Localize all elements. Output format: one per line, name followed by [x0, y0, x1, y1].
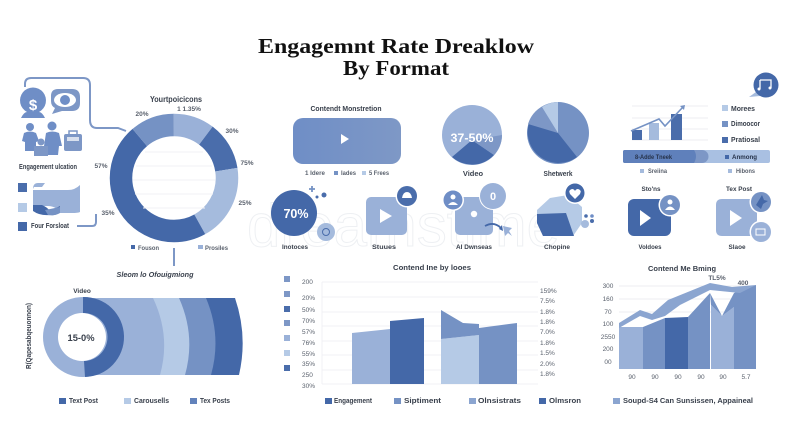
right axis	[540, 288, 557, 378]
donut labels: 30%	[225, 128, 239, 135]
left axis: 70%	[302, 318, 315, 325]
title	[258, 34, 535, 80]
curved bands	[83, 298, 243, 375]
tile: stories	[366, 184, 418, 251]
tile: text post: Tex Post	[726, 186, 753, 193]
tile: ai dwnseas: AI Dwnseas	[456, 244, 492, 251]
pie: video: 37-50%	[450, 131, 494, 145]
callouts: TL5%	[708, 275, 726, 282]
donut	[43, 297, 124, 377]
tile: videos: Voldoes	[638, 244, 662, 251]
progress band	[623, 150, 770, 163]
left squares	[284, 276, 290, 371]
left axis: 55%	[302, 351, 315, 358]
left axis: 35%	[302, 361, 315, 368]
connector	[77, 214, 96, 226]
right axis: 7.0%	[540, 329, 555, 336]
y axis: 160	[603, 296, 614, 303]
band legend: Sreiina	[648, 168, 667, 175]
donut labels: Yourtpoicicons	[150, 95, 202, 104]
y axis: 300	[603, 283, 614, 290]
tile legend: Iades	[341, 170, 356, 177]
tile: videos	[628, 186, 682, 251]
donut labels: 57%	[94, 163, 108, 170]
grid	[322, 282, 538, 384]
trend arrow	[631, 105, 685, 131]
icon: family	[22, 122, 62, 156]
y axis	[601, 283, 616, 366]
title: By Format	[343, 56, 449, 80]
tile: stories: Stuues	[372, 244, 396, 251]
y axis: 2550	[601, 334, 616, 341]
pie: video	[442, 105, 502, 178]
band legend: Hibons	[736, 168, 755, 175]
tile legend	[305, 170, 389, 177]
bottom legend: Soupd-S4 Can Sunsissen, Appaineal	[623, 398, 753, 405]
donut inner guide lines	[133, 152, 215, 208]
legend	[722, 105, 760, 144]
bottom legend: Olnsistrats	[478, 398, 521, 405]
icon: dollar coin	[20, 87, 46, 118]
bars	[632, 114, 682, 140]
tile: videos: Sto'ns	[642, 186, 661, 193]
tile: chopping	[537, 182, 594, 251]
tile: ai dwnseas	[442, 182, 512, 251]
panel: stepped area chart	[601, 264, 756, 381]
band legend	[59, 398, 230, 405]
tile: ai dwnseas: 0	[490, 191, 496, 203]
tile legend: 1 Idere	[305, 170, 325, 177]
icon: briefcase	[64, 131, 82, 151]
band legend	[640, 168, 755, 175]
x axis: 90	[651, 374, 659, 381]
panel: stepped area chart: 400	[738, 280, 749, 287]
donut legend: Prosiles	[205, 245, 228, 252]
right axis: 1.5%	[540, 350, 555, 357]
x axis: 90	[719, 374, 727, 381]
right axis: 159%	[540, 288, 557, 295]
left axis	[302, 279, 315, 390]
y axis: 100	[603, 321, 614, 328]
video tile	[293, 118, 401, 164]
donut legend: Fouson	[138, 245, 159, 252]
icon: dollar coin: $	[29, 97, 38, 114]
panel: top right trend	[623, 72, 778, 175]
donut labels: 35%	[101, 210, 115, 217]
left axis: 76%	[302, 340, 315, 347]
progress band: 8-Adde Tneek	[635, 154, 672, 161]
band legend: Carousells	[134, 398, 169, 405]
left axis: 200	[302, 279, 313, 286]
legend: Dimoocor	[731, 121, 760, 128]
right axis: 1.8%	[540, 371, 555, 378]
donut labels: 1 1.35%	[177, 106, 201, 113]
pie: shetwerk	[527, 102, 589, 178]
panel: content monstretion	[293, 104, 401, 177]
panel: top left icons	[18, 78, 126, 231]
grid	[619, 286, 756, 312]
panel: content monstretion: Contendt Monstretion	[310, 104, 382, 113]
areas	[619, 283, 756, 369]
pie: video: Video	[463, 169, 484, 178]
left axis: 57%	[302, 329, 315, 336]
bottom legend: Engagement	[334, 398, 373, 405]
chart grid	[632, 106, 708, 140]
panel: band chart: Sleom lo Ofouigmiong	[116, 272, 194, 279]
connector bracket	[25, 78, 126, 131]
y axis: 70	[604, 309, 612, 316]
band legend: Text Post	[69, 398, 99, 405]
bottom legend: Olmsron	[549, 398, 581, 405]
left axis: 30%	[302, 383, 315, 390]
icon: music badge	[749, 72, 778, 98]
right axis: 1.8%	[540, 319, 555, 326]
right axis: 1.8%	[540, 309, 555, 316]
bottom legend: Siptiment	[404, 398, 442, 405]
label: Four Forsloat	[31, 223, 70, 230]
left axis: 50%	[302, 307, 315, 314]
tile: chopping: Chopine	[544, 244, 570, 251]
donut labels	[94, 95, 254, 217]
left axis: 250	[302, 372, 313, 379]
donut: 15-0%	[68, 333, 95, 344]
panel: stepped area chart: Contend Me Bming	[648, 264, 716, 273]
icon: hand shape	[33, 183, 80, 215]
band legend: Tex Posts	[200, 398, 230, 405]
tile: text post	[716, 186, 772, 251]
bottom legend	[325, 398, 753, 405]
icon: speech bubble eye	[51, 89, 80, 114]
label: Engagement ulcation	[19, 164, 77, 171]
watermark: dreamstime	[247, 192, 560, 259]
legend: Morees	[731, 106, 755, 113]
donut legend	[131, 245, 228, 252]
x axis: 90	[697, 374, 705, 381]
left axis: 20%	[302, 295, 315, 302]
panel: band chart	[26, 272, 243, 405]
title: Engagemnt Rate Dreaklow	[258, 34, 535, 58]
y axis: 00	[604, 359, 612, 366]
right axis: 2.0%	[540, 361, 555, 368]
legend squares	[18, 183, 27, 231]
x axis: 90	[674, 374, 682, 381]
connector line	[173, 248, 175, 266]
pie: shetwerk: Shetwerk	[544, 171, 573, 178]
tile: text post: Slaoe	[728, 244, 746, 251]
panel: area bar chart	[284, 263, 557, 390]
x axis	[628, 374, 751, 381]
right axis: 7.5%	[540, 298, 555, 305]
donut chart: your positions	[94, 95, 254, 252]
tile legend: 5 Frees	[369, 170, 389, 177]
x axis: 5.7	[741, 374, 751, 381]
donut labels: 75%	[240, 160, 254, 167]
y axis: 200	[603, 346, 614, 353]
stat: 70%: 70%	[283, 207, 309, 221]
stat: 70%: Inotoces	[282, 244, 308, 251]
bars	[352, 310, 517, 384]
stat: 70%	[271, 186, 335, 251]
right axis: 1.8%	[540, 340, 555, 347]
donut labels: 20%	[135, 111, 149, 118]
progress band: Anmong	[732, 154, 757, 161]
panel: area bar chart: Contend Ine by looes	[393, 263, 471, 272]
x axis: 90	[628, 374, 636, 381]
donut labels: 25%	[238, 200, 252, 207]
panel: band chart: Video	[73, 288, 91, 295]
legend: Pratiosal	[731, 137, 760, 144]
rotated axis label: R(Qapesabqeuonnon)	[26, 303, 33, 369]
icon: play	[341, 134, 349, 144]
